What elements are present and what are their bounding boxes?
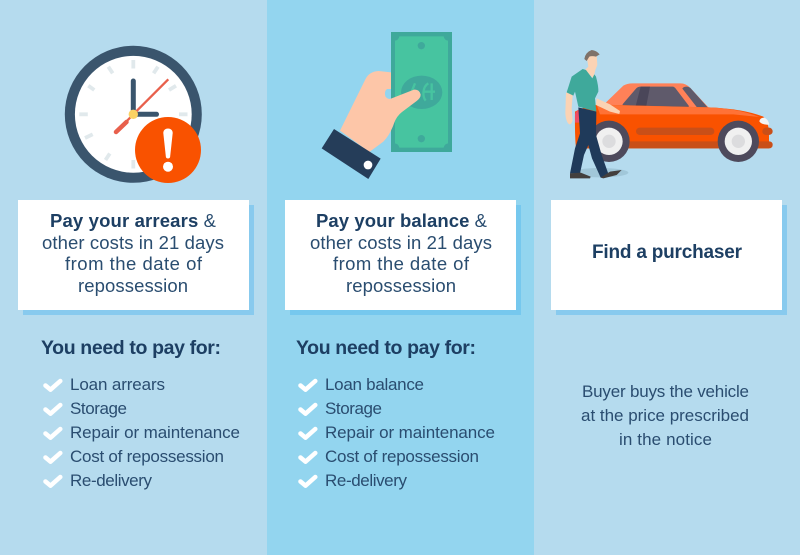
- text: buyer description: in the notice: [619, 430, 712, 449]
- checklist: arrears costs: Re-delivery: [70, 471, 152, 490]
- callout: pay your balance: other costs in 21 days: [310, 232, 492, 253]
- man figure: [565, 50, 622, 178]
- checklist: balance costs: Storage: [325, 399, 382, 418]
- callout: find a purchaser: [551, 200, 787, 315]
- callout: pay your balance: from the date of: [333, 253, 470, 274]
- checklist: arrears costs: Repair or maintenance: [70, 423, 240, 442]
- text: buyer description: [581, 382, 749, 449]
- callout: pay your arrears: repossession: [78, 275, 188, 296]
- checklist: balance costs: Loan balance: [325, 375, 424, 394]
- icon: clock with warning badge: [65, 46, 202, 183]
- callout: pay your balance: repossession: [346, 275, 456, 296]
- panel: find a purchaser: [534, 0, 800, 555]
- callout: pay your arrears: from the date of: [65, 253, 203, 274]
- checklist: balance costs: Repair or maintenance: [325, 423, 495, 442]
- callout: pay your balance: [285, 200, 521, 315]
- checklist: arrears costs: [46, 375, 240, 490]
- text: buyer description: Buyer buys the vehicle: [582, 382, 749, 401]
- icon: man beside red car: [565, 50, 773, 178]
- checklist: arrears costs: Loan arrears: [70, 375, 165, 394]
- callout: pay your balance: Pay your balance &: [316, 210, 488, 231]
- panel: pay balance: [267, 0, 534, 555]
- callout: pay your arrears: Pay your arrears &: [50, 210, 217, 231]
- checklist: balance costs: [300, 375, 495, 490]
- checklist: arrears costs: Cost of repossession: [70, 447, 224, 466]
- checklist: arrears costs: Storage: [70, 399, 127, 418]
- panel: pay arrears: [0, 0, 267, 555]
- text: buyer description: at the price prescribed: [581, 406, 749, 425]
- callout: pay your arrears: other costs in 21 days: [42, 232, 224, 253]
- heading: you need to pay for: You need to pay for:: [41, 337, 221, 359]
- heading: you need to pay for: You need to pay for:: [296, 337, 476, 359]
- icon: hand holding banknote: [322, 32, 452, 179]
- checklist: balance costs: Re-delivery: [325, 471, 408, 490]
- checklist: balance costs: Cost of repossession: [325, 447, 479, 466]
- callout: find a purchaser: Find a purchaser: [592, 242, 743, 263]
- callout: pay your arrears: [18, 200, 254, 315]
